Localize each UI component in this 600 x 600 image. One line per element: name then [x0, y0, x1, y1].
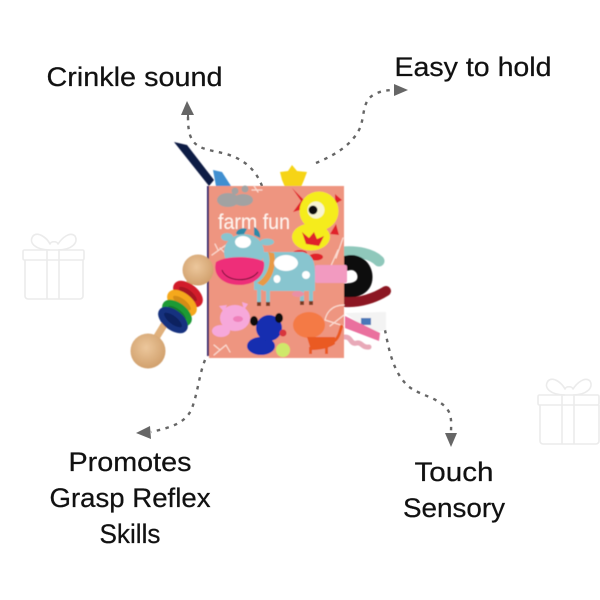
icon: gift outline right — [538, 379, 599, 444]
cover title: farm fun — [218, 211, 290, 234]
arrow: to Touch Sensory — [385, 330, 457, 447]
dog — [247, 313, 290, 357]
heading: Easy to hold: Easy to hold — [394, 52, 552, 82]
pink fabric tab — [315, 265, 347, 283]
heading: Promotes Grasp Reflex Skills — [50, 447, 211, 549]
blue ribbon tag — [213, 170, 231, 186]
mouse — [217, 186, 253, 207]
heading: Touch Sensory — [403, 457, 506, 523]
pig — [212, 302, 250, 337]
teal teether loop — [343, 252, 379, 261]
pale pink squiggle ribbon — [345, 337, 369, 347]
icon: gift outline left — [23, 234, 84, 299]
blue tag print — [361, 318, 371, 325]
cow — [215, 227, 315, 306]
arrow: to Easy to hold — [316, 84, 408, 163]
heading: Touch Sensory: Sensory — [403, 493, 506, 523]
yellow star teether — [280, 165, 307, 187]
navy ribbon tag — [174, 142, 214, 186]
black fabric ring — [344, 263, 365, 291]
heading: Touch Sensory: Touch — [414, 457, 494, 487]
product: farm fun cloth book with toys — [130, 142, 386, 368]
heading: Promotes Grasp Reflex Skills: Promotes — [68, 447, 192, 477]
heading: Promotes Grasp Reflex Skills: Skills — [100, 519, 160, 549]
heading: Crinkle sound: Crinkle sound — [46, 62, 222, 92]
white cover doodles — [212, 186, 344, 355]
pink dotted ribbon — [345, 316, 380, 341]
dark red crinkle ribbon — [345, 291, 386, 302]
cat — [293, 312, 342, 354]
white label tag — [345, 312, 386, 333]
book side spine — [207, 186, 210, 356]
heading: Promotes Grasp Reflex Skills: Grasp Reflex — [50, 483, 211, 513]
arrow: to Promotes Grasp Reflex Skills — [136, 360, 205, 439]
book cover — [209, 186, 344, 358]
duck — [292, 188, 342, 260]
arrow: to Crinkle sound — [181, 101, 262, 186]
wooden rattle — [130, 254, 214, 368]
